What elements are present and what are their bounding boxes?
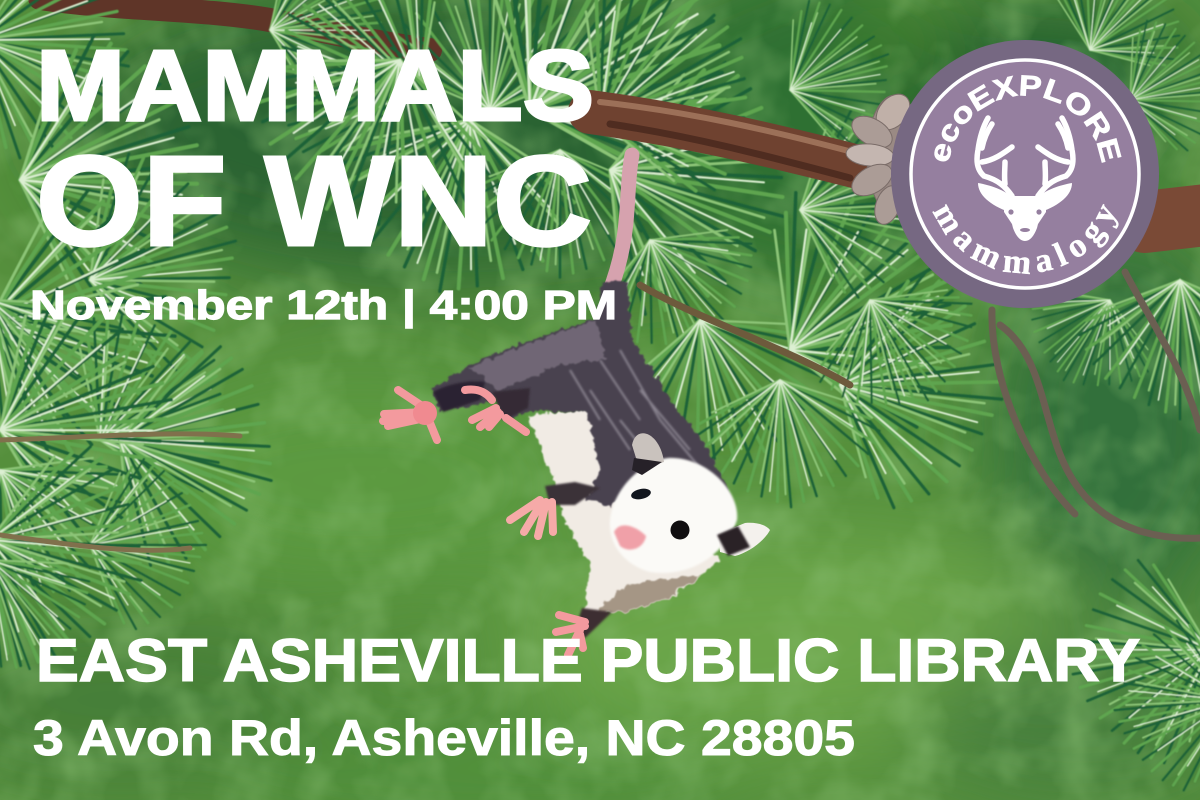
white head bbox=[610, 458, 737, 573]
title: Mammals of WNC: OF WNC bbox=[36, 130, 592, 273]
grey fur streaks bbox=[570, 350, 710, 480]
dark wrist patches bbox=[433, 381, 485, 412]
logo badge: ecoEXPLORE mammalogy bbox=[891, 40, 1159, 308]
curved label: ecoEXPLORE: ecoEXPLORE bbox=[934, 75, 1122, 163]
title: Mammals of WNC: MAMMALS bbox=[36, 30, 594, 142]
tail bbox=[612, 155, 632, 285]
nose bbox=[614, 525, 646, 550]
opossum hanging from tail bbox=[383, 155, 770, 655]
ear: right bbox=[718, 523, 770, 556]
date and time: November 12th | 4:00 PM bbox=[30, 282, 617, 328]
title: Mammals of WNC bbox=[36, 30, 594, 273]
pine cone bbox=[845, 88, 923, 228]
light belly and chest fur bbox=[527, 410, 720, 614]
eyes bbox=[630, 487, 652, 501]
lighter back fur bbox=[470, 320, 605, 390]
pine branch (upper left) behind needles bbox=[40, 0, 430, 50]
pink paws bbox=[383, 389, 585, 655]
curved label: mammalogy: mammalogy bbox=[932, 204, 1119, 274]
tan lower fur bbox=[596, 575, 700, 612]
icon: deer head bbox=[977, 118, 1073, 241]
venue address: 3 Avon Rd, Asheville, NC 28805 bbox=[33, 710, 855, 766]
venue name: EAST ASHEVILLE PUBLIC LIBRARY bbox=[36, 627, 1140, 694]
pine branch with cone bbox=[0, 88, 1200, 550]
ear: upper bbox=[632, 433, 664, 466]
dark body and forelegs bbox=[432, 280, 735, 507]
